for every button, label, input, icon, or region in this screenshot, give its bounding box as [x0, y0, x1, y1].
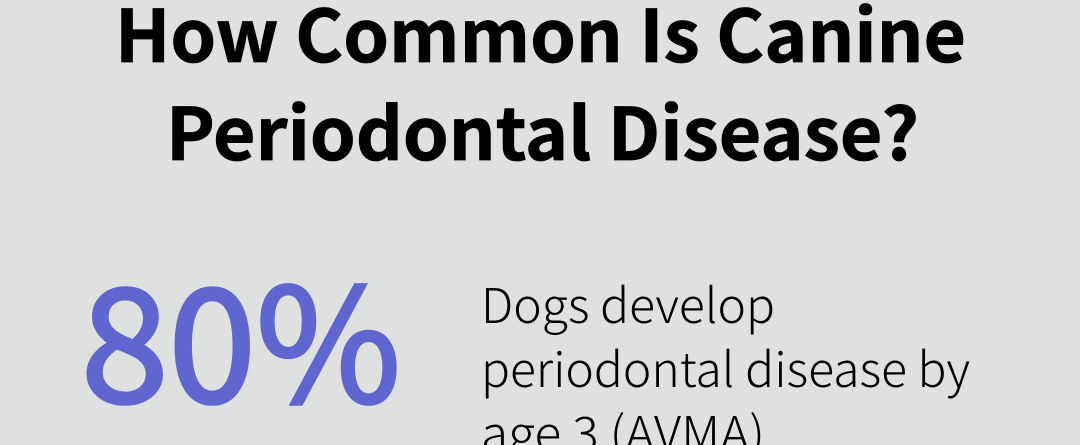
- statistic description: periodontal disease by: [481, 331, 970, 401]
- title: Periodontal Disease?: [166, 76, 919, 181]
- statistic description: Dogs develop: [481, 267, 775, 337]
- statistic description: [481, 267, 970, 445]
- title: [115, 0, 966, 181]
- statistic: 80%: 80%: [81, 221, 401, 445]
